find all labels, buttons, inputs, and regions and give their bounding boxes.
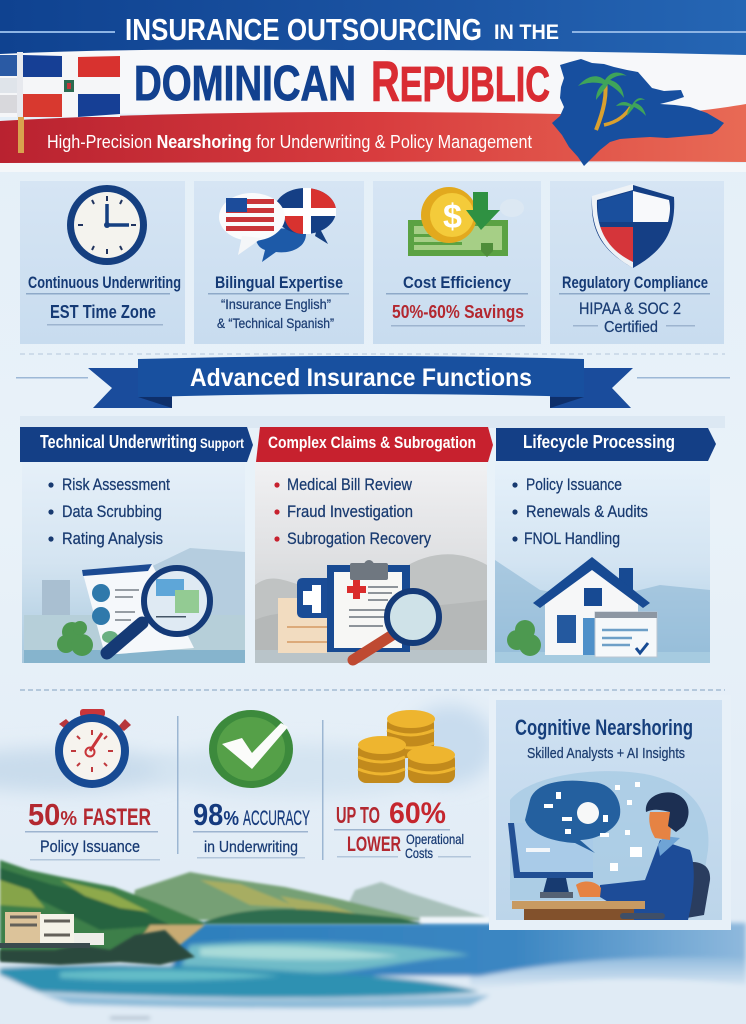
header ribbon bbox=[20, 427, 253, 462]
subtitle: High-Precision Nearshoring for Underwriting & Policy Management bbox=[47, 132, 532, 152]
icon: clock bbox=[67, 185, 147, 265]
title line 2: DOMINICAN bbox=[134, 57, 356, 111]
faint landscape bbox=[495, 560, 710, 655]
ribbon title: Advanced Insurance Functions bbox=[190, 364, 532, 392]
stat: 50 percent faster: FASTER bbox=[83, 804, 151, 831]
panel: lifecycle processing bbox=[495, 428, 716, 663]
heading: Cognitive Nearshoring bbox=[515, 715, 693, 740]
bullet list: Fraud Investigation bbox=[287, 502, 413, 521]
icon: stopwatch bbox=[55, 709, 131, 788]
detail: & “Technical Spanish” bbox=[217, 315, 334, 331]
detail: Certified bbox=[604, 319, 658, 336]
detail bbox=[217, 296, 334, 331]
sea bbox=[0, 923, 746, 1024]
title line 1: IN THE bbox=[494, 21, 559, 44]
title line 1 bbox=[0, 12, 746, 47]
background: coastal landscape bbox=[0, 705, 746, 1024]
icon: house with policy form bbox=[507, 557, 657, 657]
bullet list bbox=[274, 475, 431, 548]
panel: technical underwriting support bbox=[20, 427, 253, 663]
value: 98% bbox=[193, 797, 239, 832]
icon: island map with palms bbox=[552, 59, 724, 166]
header ribbon bbox=[256, 427, 493, 462]
faint landscape bbox=[24, 548, 245, 663]
label: Policy Issuance bbox=[40, 837, 140, 856]
icon: green check bbox=[209, 710, 293, 788]
bullet list: Rating Analysis bbox=[62, 529, 163, 548]
panel: cost efficiency bbox=[373, 181, 541, 344]
icon: gold coin stacks bbox=[358, 710, 455, 783]
icon: coin, banknote and arrow: $ bbox=[443, 198, 462, 236]
rocks bbox=[0, 930, 195, 965]
hills bbox=[0, 860, 490, 960]
title line 1: INSURANCE OUTSOURCING bbox=[125, 12, 482, 47]
hotel bbox=[0, 912, 104, 948]
bullet list: Risk Assessment bbox=[62, 475, 170, 494]
subheading: Skilled Analysts + AI Insights bbox=[527, 745, 685, 762]
value: UP TO bbox=[336, 802, 380, 828]
icon: clipboard with magnifier bbox=[278, 560, 439, 660]
bullet list: Data Scrubbing bbox=[62, 502, 162, 521]
bullet list bbox=[512, 475, 648, 548]
icon: speech bubbles bbox=[219, 188, 336, 262]
header banner bbox=[0, 0, 746, 172]
bullet list: Medical Bill Review bbox=[287, 475, 413, 494]
detail: HIPAA & SOC 2 bbox=[579, 299, 681, 318]
panel: complex claims and subrogation bbox=[255, 427, 493, 663]
detail bbox=[573, 299, 695, 336]
stat: 50 percent faster bbox=[25, 709, 160, 860]
stat: 98 percent accuracy: ACCURACY bbox=[243, 807, 310, 830]
stat: up to 60 percent lower costs: Costs bbox=[405, 845, 433, 861]
illustration: analyst with AI brain bbox=[508, 771, 710, 920]
value: 50% bbox=[28, 797, 77, 832]
panel: cognitive nearshoring bbox=[489, 695, 731, 930]
heading: Bilingual Expertise bbox=[215, 273, 343, 292]
faint landscape bbox=[255, 554, 487, 663]
stat: up to 60 percent lower costs: Operational bbox=[406, 831, 464, 847]
detail: “Insurance English” bbox=[221, 296, 331, 312]
panel: continuous underwriting bbox=[20, 181, 185, 344]
detail: EST Time Zone bbox=[50, 302, 156, 322]
title line 2: REPUBLIC bbox=[371, 50, 550, 114]
stat: 98 percent accuracy bbox=[193, 710, 310, 858]
header ribbon: Support bbox=[200, 435, 244, 451]
header ribbon bbox=[496, 428, 716, 461]
label: in Underwriting bbox=[204, 839, 298, 856]
panel: bilingual expertise bbox=[194, 181, 364, 344]
icon: shield bbox=[592, 184, 674, 268]
bullet list: Subrogation Recovery bbox=[287, 529, 431, 548]
heading: Cost Efficiency bbox=[403, 273, 511, 292]
panel: regulatory compliance bbox=[550, 181, 724, 344]
title line 2 bbox=[134, 50, 550, 114]
header ribbon: Complex Claims & Subrogation bbox=[268, 433, 476, 452]
bullet list bbox=[48, 475, 170, 548]
stat: up to 60 percent lower costs bbox=[334, 710, 471, 861]
section ribbon: advanced insurance functions bbox=[16, 356, 730, 408]
icon: Dominican flag bbox=[0, 52, 120, 153]
icon: document under magnifier bbox=[57, 564, 210, 656]
heading: Continuous Underwriting bbox=[28, 273, 181, 292]
label: LOWER bbox=[347, 833, 401, 856]
stat: up to 60 percent lower costs: 60% bbox=[389, 797, 446, 830]
bullet list: FNOL Handling bbox=[524, 529, 620, 548]
bullet list: Renewals & Audits bbox=[526, 502, 648, 521]
icon: coin, banknote and arrow bbox=[408, 187, 524, 257]
header ribbon: Lifecycle Processing bbox=[523, 432, 675, 452]
bullet list: Policy Issuance bbox=[526, 475, 622, 494]
header ribbon: Technical Underwriting bbox=[40, 432, 197, 452]
detail: 50%-60% Savings bbox=[392, 302, 524, 322]
